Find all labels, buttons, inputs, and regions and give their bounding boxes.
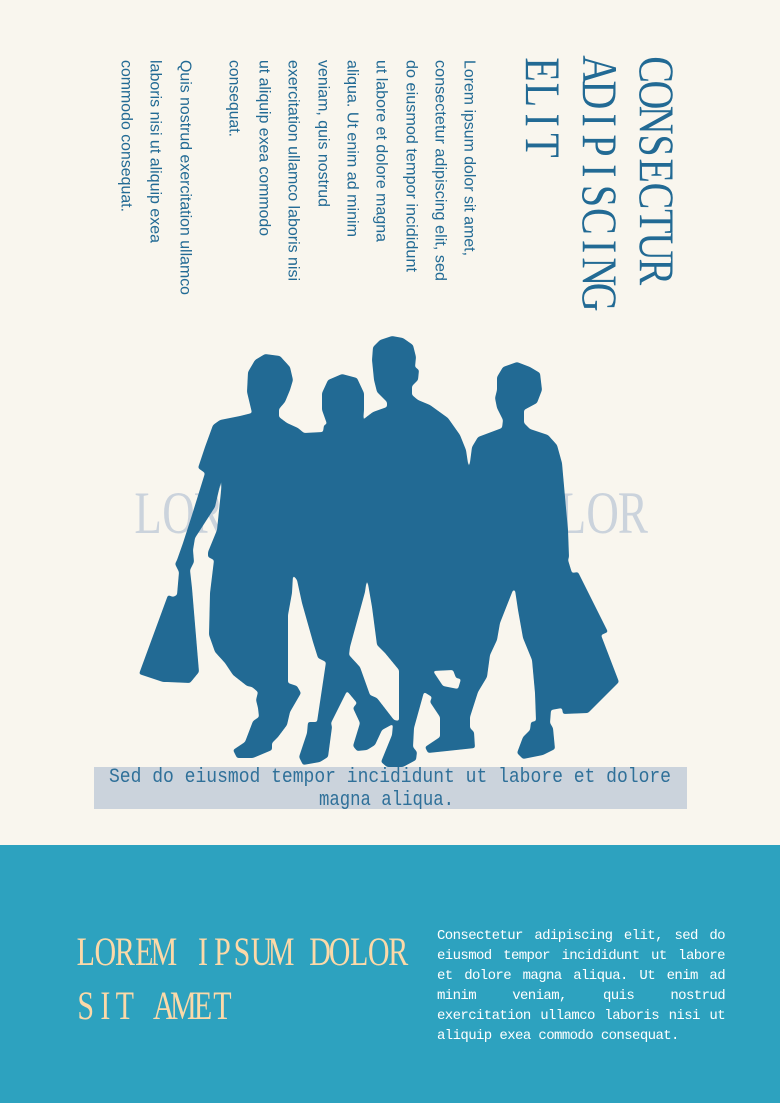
caption text: Sed do eiusmod tempor incididunt ut labore et dolore — [109, 766, 671, 789]
vertical body text: exercitation ullamco laboris nisi — [284, 60, 302, 281]
vertical body text: veniam, quis nostrud — [314, 60, 332, 207]
caption bar background — [94, 767, 687, 809]
bottom teal band — [0, 845, 780, 1103]
vertical body text: consectetur adipiscing elit, sed — [432, 60, 448, 281]
bottom heading: SIT AMET — [77, 983, 232, 1028]
bottom heading — [77, 929, 409, 1028]
bottom heading: LOREM IPSUM DOLOR — [77, 929, 409, 974]
silhouette: four shoppers with bags — [139, 336, 619, 767]
vertical title: ELIT — [515, 57, 570, 158]
vertical body text — [118, 60, 478, 295]
vertical body text: Quis nostrud exercitation ullamco — [176, 60, 194, 295]
vertical body text: ut labore et dolore magna — [372, 60, 390, 242]
bottom paragraph: Consectetur adipiscing elit, sed do eiusmod tempor incididunt ut labore et dolore magna aliqua. Ut enim ad minim veniam, quis nostrud exercitation ullamco laboris nisi ut aliquip exea commodo consequat. — [437, 928, 725, 1044]
vertical body text: ut aliquip exea commodo — [256, 60, 272, 236]
vertical body text: aliqua. Ut enim ad minim — [344, 60, 360, 237]
watermark heading behind silhouette: LOREM IPSUM DOLOR — [134, 481, 648, 547]
vertical title — [515, 55, 684, 312]
caption text — [109, 766, 671, 812]
vertical body text: do eiusmod tempor incididunt — [402, 60, 420, 273]
vertical title: ADIPISCING — [572, 55, 627, 312]
vertical title: CONSECTUR — [629, 56, 684, 286]
vertical body text: consequat. — [226, 60, 242, 137]
caption text: magna aliqua. — [319, 789, 454, 812]
vertical body text: laboris nisi ut aliquip exea — [146, 60, 164, 243]
vertical body text: Lorem ipsum dolor sit amet, — [460, 60, 478, 256]
vertical body text: commodo consequat. — [118, 60, 134, 212]
